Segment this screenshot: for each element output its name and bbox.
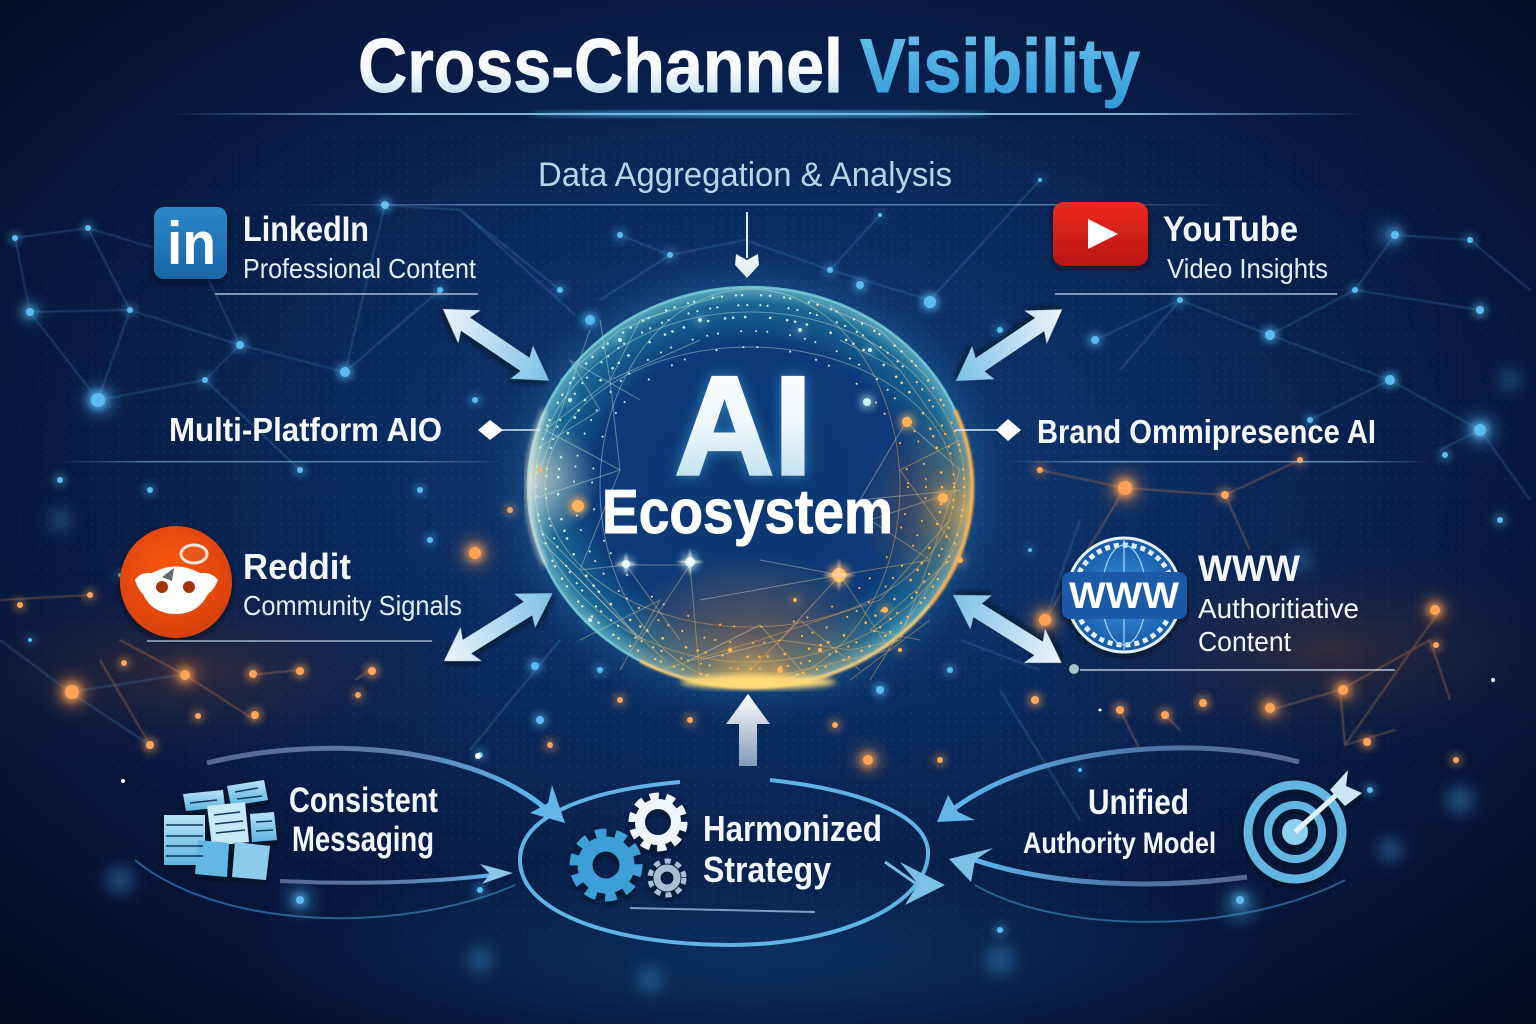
bottom glow xyxy=(680,675,836,689)
YouTube name: YouTube xyxy=(1163,210,1298,249)
strategy loop xyxy=(520,780,945,945)
arrow: YouTube to sphere xyxy=(945,293,1073,398)
Reddit description: Community Signals xyxy=(243,590,462,621)
panel: Reddit xyxy=(120,526,462,642)
LinkedIn underline xyxy=(215,293,478,295)
arrow: data aggregation down to sphere xyxy=(735,212,759,278)
icon: gears xyxy=(574,796,684,897)
title: Visibility xyxy=(860,24,1140,109)
background network: orange links xyxy=(0,460,1450,750)
icon: LinkedIn xyxy=(154,207,227,279)
arrow: strategy up to sphere xyxy=(726,694,770,766)
background nodes: orange xyxy=(17,457,1459,765)
icon: YouTube xyxy=(1053,202,1148,266)
sphere nodes: orange xyxy=(538,417,963,673)
YouTube underline xyxy=(1055,293,1337,295)
unified text: Authority Model xyxy=(1023,827,1216,860)
label: Brand Ommipresence AI xyxy=(955,413,1430,462)
central sphere: AI Ecosystem xyxy=(514,275,986,699)
background network: blue links xyxy=(0,180,1530,820)
decorative lower-left arc xyxy=(135,860,515,918)
arrow: LinkedIn to sphere xyxy=(432,292,560,397)
panel: YouTube xyxy=(1053,202,1337,295)
Reddit name: Reddit xyxy=(243,546,351,587)
arrow: WWW to sphere xyxy=(942,578,1072,680)
sphere nodes: blue xyxy=(568,318,872,622)
LinkedIn description: Professional Content xyxy=(243,253,476,284)
sphere body xyxy=(514,275,986,699)
label: Multi-Platform AIO xyxy=(60,411,540,462)
arrow: consistent messaging curve to strategy xyxy=(207,748,565,823)
panel: WWW xyxy=(1062,538,1395,674)
icon: LinkedIn: in xyxy=(167,210,216,277)
consistent messaging text: Messaging xyxy=(292,820,434,859)
WWW description: Content xyxy=(1198,626,1291,657)
unified text: Unified xyxy=(1088,783,1189,822)
unified text xyxy=(1023,783,1216,860)
label: Multi-Platform AIO: Multi-Platform AIO xyxy=(169,411,442,448)
panel: Harmonized Strategy xyxy=(574,796,882,897)
title underline glow xyxy=(170,111,1370,117)
strategy text xyxy=(703,808,882,890)
YouTube description: Video Insights xyxy=(1167,253,1328,284)
label: Brand Ommipresence AI: Brand Ommipresence AI xyxy=(1037,413,1376,450)
WWW description: Authoritiative xyxy=(1198,593,1359,624)
WWW description xyxy=(1198,593,1359,657)
consistent messaging text xyxy=(289,781,438,859)
background: horizontal light streaks xyxy=(0,481,1536,662)
panel: Consistent Messaging xyxy=(164,780,438,880)
panel: Unified Authority Model xyxy=(1023,770,1362,879)
strategy text: Strategy xyxy=(703,849,831,890)
sphere mesh xyxy=(530,289,965,685)
sphere speckle points xyxy=(536,295,964,679)
icon: stacked documents xyxy=(164,780,277,880)
WWW underline xyxy=(1069,664,1395,674)
arrow: consistent messaging line to strategy xyxy=(280,864,513,884)
decorative lower-right arc xyxy=(975,880,1345,922)
arrow: unified authority curve to strategy xyxy=(937,748,1299,822)
icon: WWW globe xyxy=(1062,538,1187,652)
panel: LinkedIn xyxy=(154,207,478,295)
background: orange halos xyxy=(56,472,1447,772)
consistent messaging text: Consistent xyxy=(289,781,438,820)
AI label: AI xyxy=(675,347,812,504)
background nodes: blue xyxy=(12,178,1503,933)
WWW name: WWW xyxy=(1198,548,1300,589)
title: Cross-Channel xyxy=(358,24,843,109)
background: out-of-focus bokeh xyxy=(20,223,1520,992)
title xyxy=(358,24,1140,109)
sphere flares xyxy=(615,548,856,592)
Reddit underline xyxy=(147,640,432,642)
LinkedIn name: LinkedIn xyxy=(243,210,369,249)
heading: Data Aggregation & Analysis: Data Aggregation & Analysis xyxy=(538,156,952,194)
arrow: Reddit to sphere xyxy=(433,576,563,678)
strategy text: Harmonized xyxy=(703,808,882,849)
sphere rim xyxy=(528,287,972,687)
arrow: unified authority line to strategy xyxy=(949,848,1247,884)
icon: target with dart xyxy=(1248,770,1362,879)
Ecosystem label: Ecosystem xyxy=(602,478,893,547)
sparkle accents xyxy=(121,678,1495,783)
icon: Reddit xyxy=(120,526,232,638)
divider under data heading xyxy=(280,204,1240,206)
icon: WWW globe: WWW xyxy=(1069,575,1179,616)
